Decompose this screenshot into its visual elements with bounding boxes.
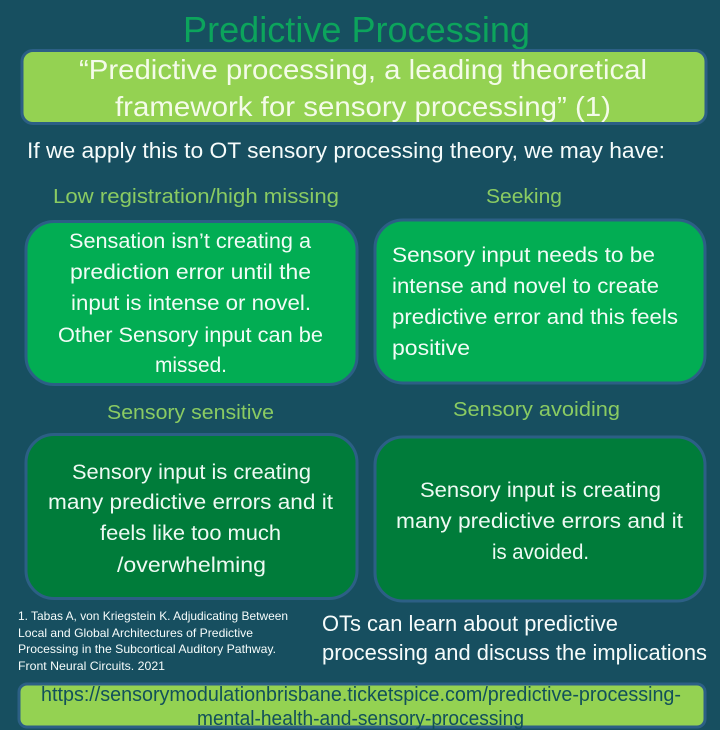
call to action text: OTs can learn about predictive [322, 611, 618, 636]
panel: link [19, 684, 705, 730]
panel: sensory sensitive [26, 434, 357, 598]
panel: sensory avoiding [375, 437, 705, 601]
panel: low registration: missed. [155, 354, 227, 377]
intro text: If we apply this to OT sensory processing theory, we may have: [27, 138, 665, 163]
panel: quote: “Predictive processing, a leading theoretical [79, 54, 647, 85]
heading: sensory sensitive: Sensory sensitive [107, 401, 274, 424]
reference citation: Processing in the Subcortical Auditory Pathway. [18, 642, 276, 656]
panel: link: https://sensorymodulationbrisbane.ticketspice.com/predictive-processing- [41, 684, 681, 706]
panel: sensory avoiding: Sensory input is creating [420, 479, 661, 502]
reference citation [18, 609, 288, 673]
panel: seeking: predictive error and this feels [392, 306, 678, 329]
panel: sensory avoiding: many predictive errors and it [396, 510, 683, 533]
panel: link: mental-health-and-sensory-processing [197, 708, 524, 730]
heading: seeking: Seeking [486, 185, 562, 208]
panel: low registration: Other Sensory input can be [58, 324, 323, 347]
panel: seeking: Sensory input needs to be [392, 244, 655, 267]
panel: sensory sensitive: feels like too much [100, 522, 281, 545]
panel: low registration [26, 222, 357, 384]
reference citation: Front Neural Circuits. 2021 [18, 659, 165, 673]
heading: low registration: Low registration/high missing [53, 185, 339, 208]
reference citation: Local and Global Architectures of Predictive [18, 626, 253, 640]
panel: seeking: positive [392, 337, 470, 360]
title: Predictive Processing [183, 9, 530, 50]
panel: sensory sensitive: /overwhelming [117, 554, 266, 577]
heading: sensory avoiding: Sensory avoiding [453, 398, 620, 421]
panel: sensory avoiding: is avoided. [492, 541, 589, 564]
panel: quote [22, 50, 706, 124]
panel: low registration: Sensation isn’t creating a [69, 230, 311, 253]
panel: quote: framework for sensory processing” (1) [115, 91, 611, 122]
call to action text [322, 611, 707, 665]
panel: sensory sensitive: many predictive errors and it [48, 491, 333, 514]
panel: seeking [375, 220, 705, 383]
panel: low registration: prediction error until the [70, 261, 311, 284]
panel: sensory sensitive: Sensory input is creating [72, 461, 311, 484]
panel: seeking: intense and novel to create [392, 275, 659, 298]
reference citation: 1. Tabas A, von Kriegstein K. Adjudicating Between [18, 609, 288, 623]
call to action text: processing and discuss the implications [322, 640, 707, 665]
panel: low registration: input is intense or novel. [71, 292, 311, 315]
